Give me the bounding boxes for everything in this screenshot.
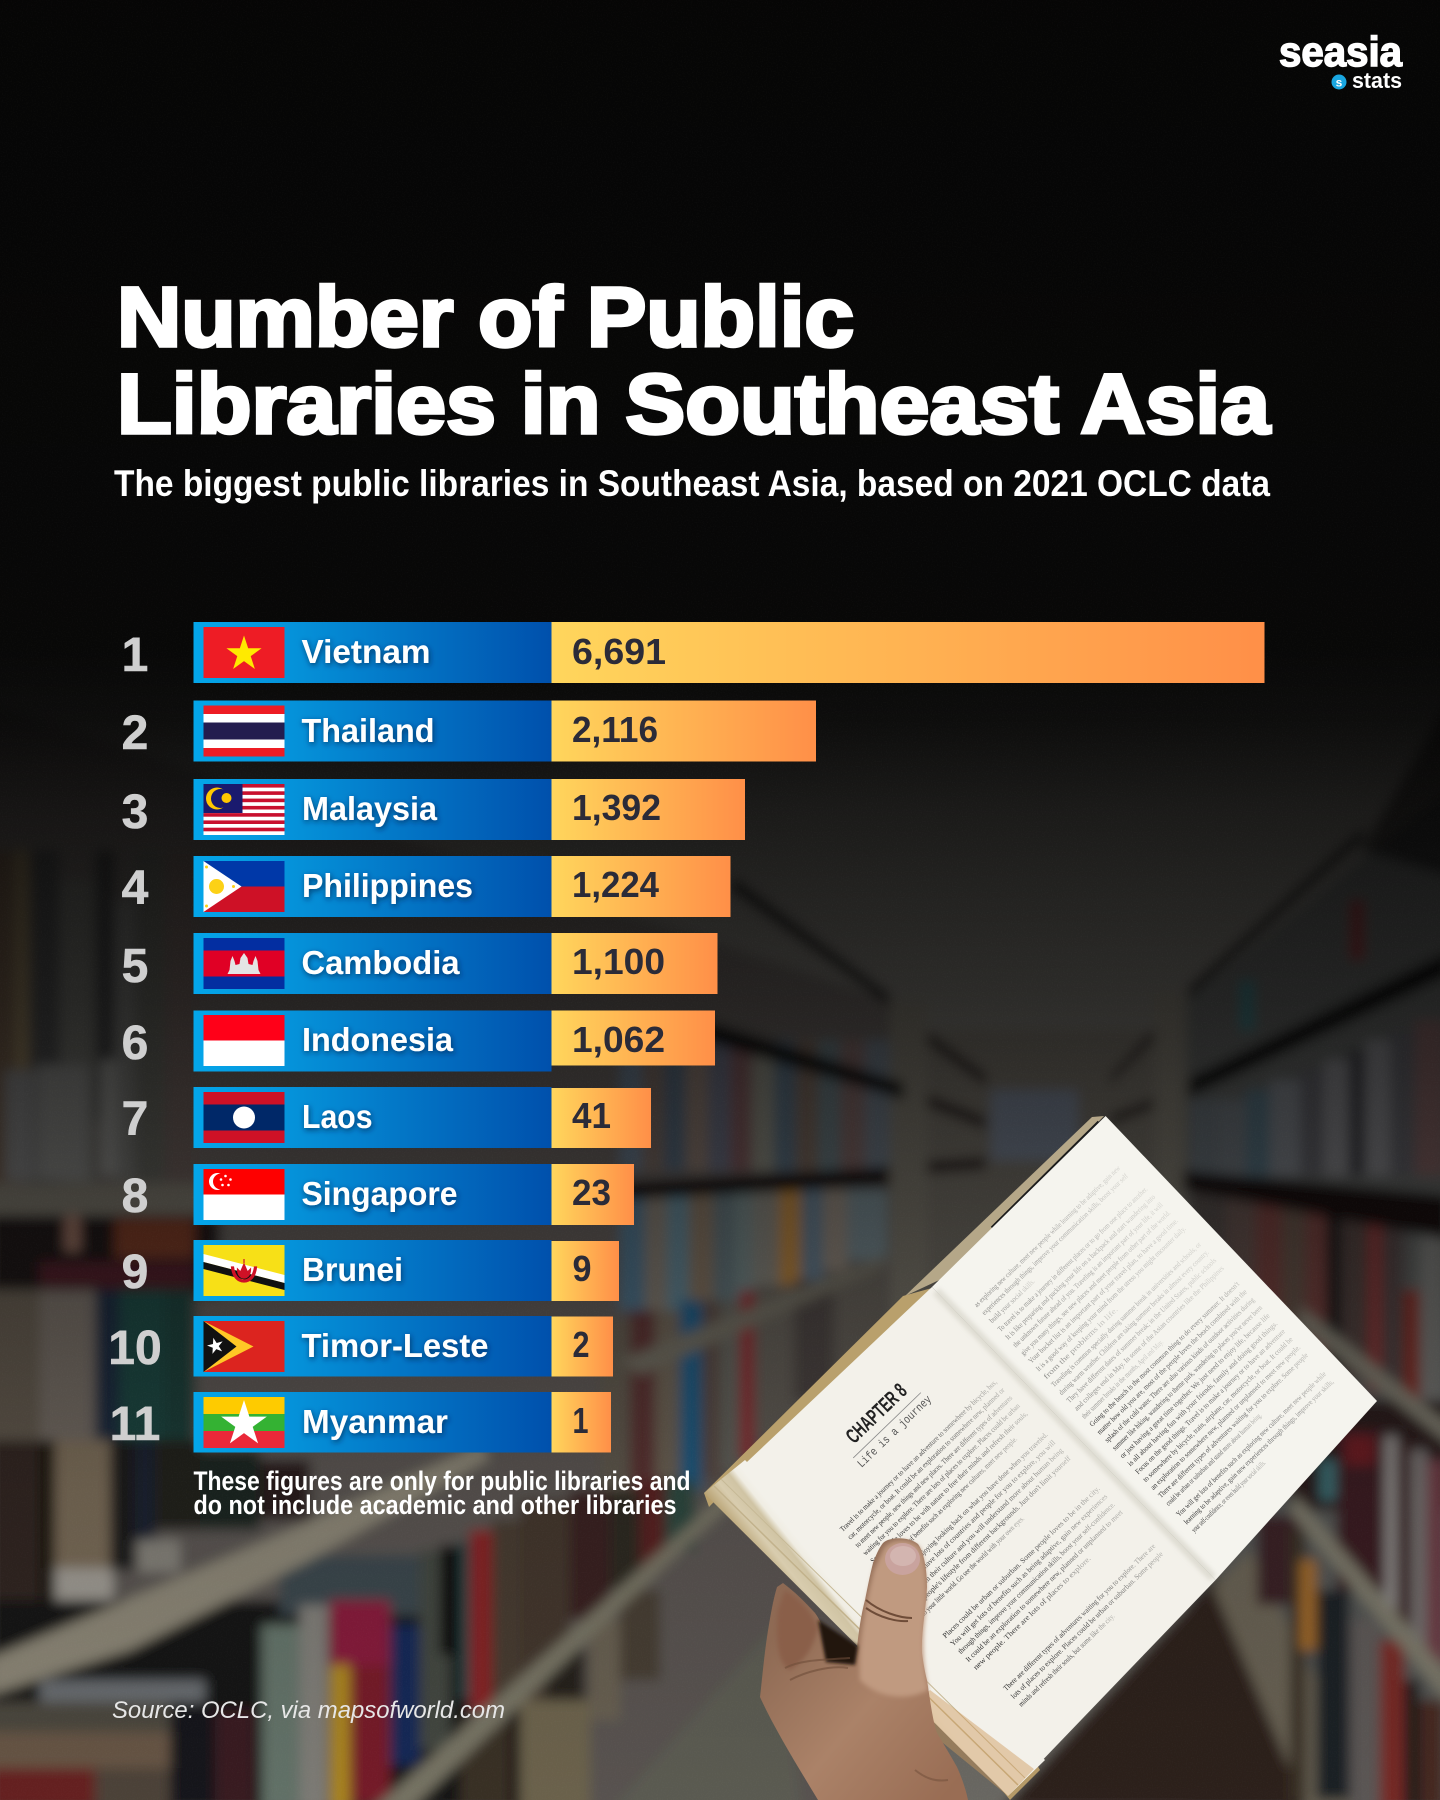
right page body text: or just having a great time together. We just need to enjoy life, because life xyxy=(1118,1311,1272,1460)
right page body text: from the problems in life. xyxy=(1042,1305,1120,1381)
chapter heading xyxy=(792,1330,1173,1713)
row 11: Myanmar: Myanmar xyxy=(302,1403,448,1440)
rank numbers: 4 xyxy=(122,862,149,915)
rank numbers: 3 xyxy=(122,786,148,839)
left shelves dark xyxy=(730,877,890,1006)
hand holding the book xyxy=(760,1538,968,1800)
row 4: Philippines: 1,224 xyxy=(572,864,659,905)
flag: Indonesia xyxy=(204,1015,284,1066)
right page body text: the unknown future ahead of you. Traveling is an important part of your life, it will xyxy=(1011,1200,1165,1349)
rank numbers: 7 xyxy=(122,1093,148,1146)
row 3: Malaysia: Malaysia xyxy=(302,790,438,827)
logo: seasia stats: seasia xyxy=(1279,28,1403,75)
rank numbers: 2 xyxy=(122,707,148,760)
row 5: Cambodia: Cambodia xyxy=(302,944,460,981)
row 11: Myanmar: 1 xyxy=(572,1400,588,1441)
row 1: Vietnam: Vietnam xyxy=(302,633,430,670)
left wall books top xyxy=(0,850,15,1183)
row 6: Indonesia xyxy=(194,1010,715,1072)
title: Number of Public xyxy=(117,270,854,364)
rank numbers: 9 xyxy=(122,1246,148,1299)
book left page xyxy=(741,1287,1216,1769)
book right page xyxy=(932,1116,1377,1580)
row 8: Singapore: 23 xyxy=(572,1172,611,1213)
source: Source: OCLC, via mapsofworld.com xyxy=(112,1697,505,1724)
flag: Timor-Leste xyxy=(204,1321,284,1372)
row 10: Timor-Leste: 2 xyxy=(572,1324,590,1365)
chapter heading: CHAPTER 8 xyxy=(842,1379,912,1448)
left page body text: car, motorcycle, or boat. It could be an exploration to somewhere new, planned or xyxy=(846,1385,1007,1541)
row 1: Vietnam: 6,691 xyxy=(572,631,666,672)
row 3: Malaysia xyxy=(194,779,745,840)
left page body text: It could be an exploration to somewhere new, planned or unplanned to meet xyxy=(964,1507,1125,1664)
footnote: do not include academic and other libraries xyxy=(194,1490,676,1520)
rank numbers xyxy=(108,629,162,1451)
left page body text: This world have lots of countries and people for you to explore, you will xyxy=(896,1438,1057,1594)
row 7: Laos xyxy=(194,1087,651,1148)
left page body text: There are different types of adventures waiting for you to explore. There are xyxy=(1001,1541,1158,1693)
right page body text: during warm weather. Children are taking summer breaks in almost every country. xyxy=(1057,1248,1211,1397)
illustration: open book held in a hand xyxy=(704,1116,1377,1800)
flag: Vietnam xyxy=(204,627,284,678)
right page body text: summer like hiking, wandering to theme park, wandering to places you've never been xyxy=(1110,1303,1264,1452)
right page body text: They have different dates of summer break; in the United States, public schools xyxy=(1064,1256,1218,1405)
left page body text: Some people loves to be with nature to free their minds and refresh their souls, xyxy=(868,1409,1029,1565)
lower left: lower shelf books xyxy=(0,1600,470,1800)
row 10: Timor-Leste xyxy=(194,1316,613,1376)
flag: Laos xyxy=(204,1092,284,1143)
row 6: Indonesia: Indonesia xyxy=(302,1021,454,1058)
logo: seasia stats: s xyxy=(1336,76,1343,90)
right page body text: experiences through things, improve your communication skills, boost your self xyxy=(980,1171,1130,1317)
left page body text: Travel is to make a journey or to have an adventure to somewhere by bicycle, bus, xyxy=(838,1378,999,1533)
left page body text xyxy=(838,1377,1173,1713)
left page body text: new people. There are lots of places to explore. xyxy=(971,1554,1093,1672)
right page body text: your self-confidence, or even build your social skills. xyxy=(1189,1458,1268,1534)
row 6: Indonesia: 1,062 xyxy=(572,1019,665,1060)
right bays xyxy=(1190,900,1440,1800)
right page body text: Your bucket list is an important part of your travel plan, to have a good time. xyxy=(1026,1216,1180,1365)
subtitle: The biggest public libraries in Southeast Asia, based on 2021 OCLC data xyxy=(114,463,1270,504)
right page body text: could be urban or suburban and stand more about human being. xyxy=(1164,1411,1264,1508)
footnote xyxy=(194,1466,690,1520)
right page body text: You will get lots of benefits such as exploring new culture, meet new people while xyxy=(1174,1369,1328,1518)
row 9: Brunei: Brunei xyxy=(302,1251,403,1288)
row 2: Thailand: Thailand xyxy=(302,712,434,749)
right page body text: build your social skills. xyxy=(987,1277,1037,1325)
left page body text: and people's lifestyle from different backgrounds. Just don't limit yourself xyxy=(912,1454,1073,1610)
title xyxy=(117,270,1271,451)
right page body text: To travel is to make a journey in different places or to go from one place to another. xyxy=(996,1185,1149,1333)
right page body text: matter how old you are, most of the people loves the beach combined with the xyxy=(1095,1287,1249,1436)
floor xyxy=(612,1620,800,1800)
right shelves xyxy=(1188,827,1363,999)
flag: Singapore xyxy=(204,1169,284,1220)
row 4: Philippines: Philippines xyxy=(302,867,473,904)
row 7: Laos: 41 xyxy=(572,1095,611,1136)
row 9: Brunei: 9 xyxy=(572,1248,592,1289)
rank numbers: 8 xyxy=(122,1170,148,1223)
row 10: Timor-Leste: Timor-Leste xyxy=(302,1327,488,1364)
right page body text: Focus on the good things. Travel is to make a journey or to have an adventure xyxy=(1133,1327,1287,1476)
footnote: These figures are only for public libraries and xyxy=(194,1466,690,1496)
right page body text: It is like preparing and packing your life on a backpack and start wandering into xyxy=(1003,1192,1157,1341)
right page body text: splash of the cold water. There are also various kinds of outdoor activities during xyxy=(1103,1295,1256,1444)
right page body text: Traveling is common specially during summer break in universities and schools, or xyxy=(1049,1240,1203,1389)
right page body text: as exploring new culture, meet new people while learning to be adaptive, gain new xyxy=(972,1163,1122,1309)
row 3: Malaysia: 1,392 xyxy=(572,787,661,828)
right page body text xyxy=(972,1160,1344,1534)
row 11: Myanmar xyxy=(194,1392,611,1452)
left page body text: through things, improve your communication skills, boost your self-confidence. xyxy=(956,1500,1117,1656)
right page body text: to somewhere by bicycle, train, airplane, car, motorcycle, or boat. It could be xyxy=(1141,1335,1295,1484)
right page body text: It is a good way of keeping your mind from the stress you might encounter daily. xyxy=(1034,1224,1188,1373)
row 8: Singapore: Singapore xyxy=(302,1175,458,1212)
logo: seasia stats: stats xyxy=(1352,68,1402,93)
left page body text: You will get lots of benefits such as being adaptive, gain new experiences xyxy=(948,1492,1109,1648)
lower left: upper shelf books xyxy=(0,1440,310,1640)
thumb highlight xyxy=(860,1540,928,1697)
flag: Philippines xyxy=(204,861,284,912)
flag: Malaysia xyxy=(204,784,284,835)
left page body text: minds and refresh their souls, but some like the city. xyxy=(1017,1612,1116,1708)
row 2: Thailand xyxy=(194,700,816,762)
book cover and spine xyxy=(704,1116,1104,1800)
rank numbers: 10 xyxy=(108,1322,162,1375)
left page body text: to your little world. Go see the world with your own eyes. xyxy=(919,1514,1026,1618)
flag: Thailand xyxy=(204,706,284,756)
rank numbers: 11 xyxy=(110,1398,160,1451)
right page body text: learning to be adaptive, gain new experiences through things, improve your skills, xyxy=(1182,1377,1336,1526)
left page body text: Places could be urban or suburban. Some people loves to be in the city. xyxy=(941,1484,1102,1640)
right page body text: an exploration to somewhere new, planned or unplanned to meet new people. xyxy=(1148,1343,1302,1492)
row 5: Cambodia xyxy=(194,933,718,994)
left page body text: You will get lots of benefits such as exploring new cultures, meet new people. xyxy=(876,1435,1019,1573)
left page body text: lots of places to explore. Places could be urban or suburban. Some people xyxy=(1009,1549,1165,1701)
chapter heading: Life is a journey xyxy=(855,1393,935,1471)
flag: Brunei xyxy=(204,1245,284,1296)
flag: Cambodia xyxy=(204,938,284,989)
right page body text: their summer breaks in the months, April and May. xyxy=(1080,1338,1165,1421)
row 8: Singapore xyxy=(194,1164,634,1225)
row 5: Cambodia: 1,100 xyxy=(572,941,665,982)
right page body text: There are different types of adventures waiting for you to explore. Some people xyxy=(1156,1350,1310,1500)
bright planks xyxy=(0,1445,490,1695)
left page body text: learn from their culture and you will understand more about human being xyxy=(904,1446,1065,1602)
right page body text: give you many things, see new places and meet people from other part of the world. xyxy=(1019,1208,1172,1357)
right page body text: and colleges end in May. In some of the Asian countries like the Philippines xyxy=(1072,1264,1226,1413)
left shelf bays right of chart xyxy=(600,1040,890,1520)
row 7: Laos: Laos xyxy=(302,1098,372,1135)
right page body text: is all about having fun with your friends, family and doing good things. xyxy=(1126,1319,1279,1468)
left page body text: to meet new people, new things and new places. There are different types of adventures xyxy=(853,1393,1014,1549)
left page body text: Some people enjoying looking back on what you have done when you traveled. xyxy=(889,1430,1050,1586)
rank numbers: 1 xyxy=(122,629,148,682)
row 9: Brunei xyxy=(194,1240,619,1301)
rank numbers: 6 xyxy=(122,1017,148,1070)
left page body text: waiting for you to explore. There are lots of places to explore. Places could be urban xyxy=(861,1401,1022,1557)
row 1: Vietnam xyxy=(194,622,1264,683)
title: Libraries in Southeast Asia xyxy=(117,357,1271,451)
book page block xyxy=(704,1460,1045,1796)
rank numbers: 5 xyxy=(122,940,148,993)
row 4: Philippines xyxy=(194,856,730,917)
row 2: Thailand: 2,116 xyxy=(572,709,658,750)
flag: Myanmar xyxy=(204,1397,284,1448)
right page body text: Going to the beach is the most common thing to do every summer. It doesn't xyxy=(1087,1279,1242,1428)
